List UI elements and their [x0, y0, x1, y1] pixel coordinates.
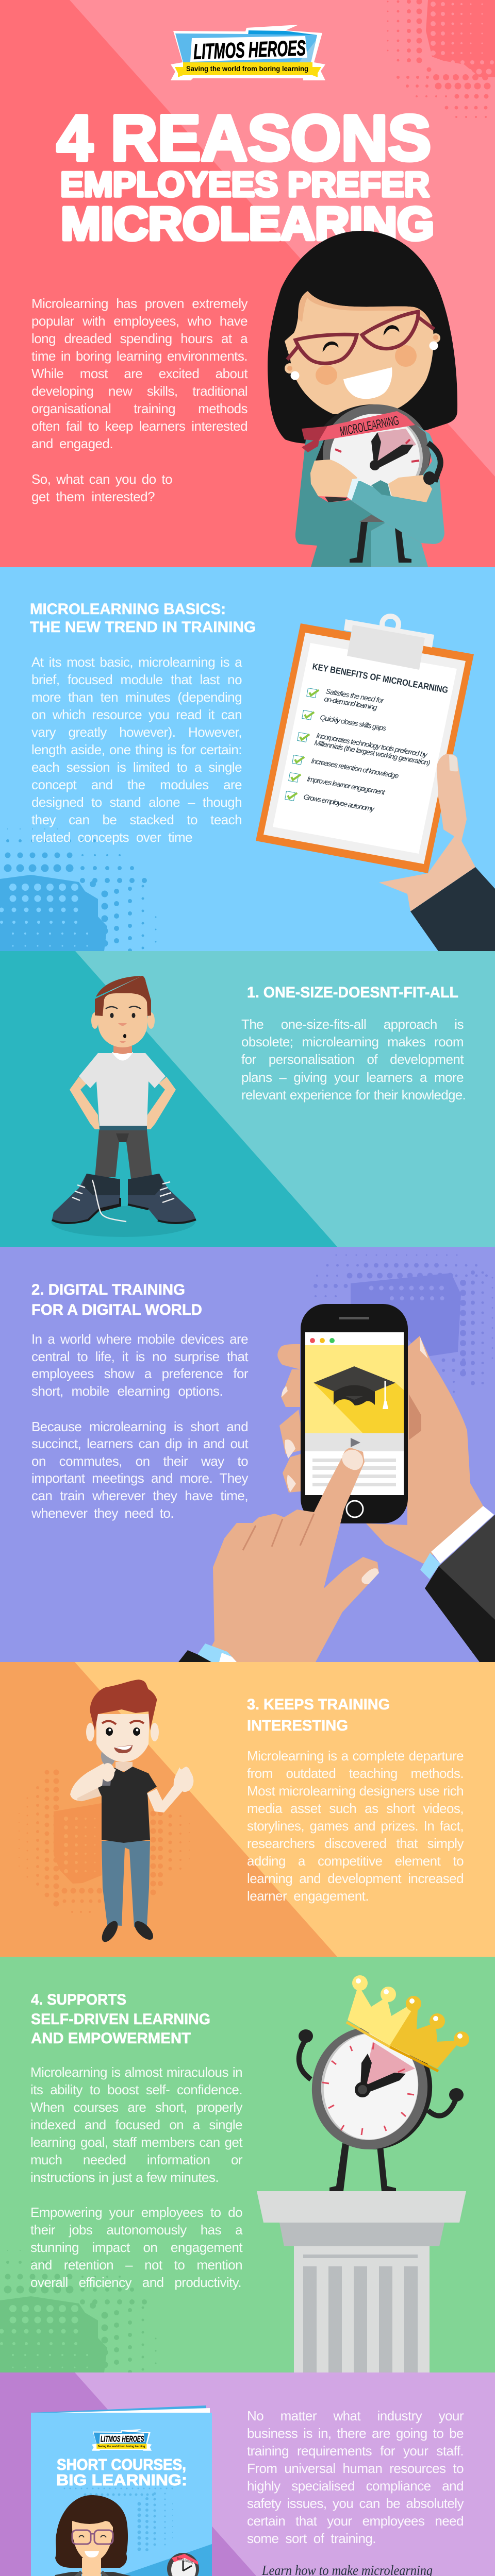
text: self-driven body	[30, 2064, 243, 2290]
pillar	[257, 2191, 466, 2372]
title: MICROLEARING	[61, 198, 434, 250]
text: basics body: brief, focused module that last no	[31, 672, 242, 687]
clipboard: on-demand learning	[324, 694, 378, 711]
halftone: green bottom left	[0, 2250, 156, 2372]
heading: basics: THE NEW TREND IN TRAINING	[30, 619, 256, 636]
heading: self-driven	[31, 1991, 210, 2047]
text: hero intro	[31, 296, 248, 504]
text: digital body: In a world where mobile devices are	[31, 1331, 248, 1347]
clipboard: Millennials (the largest working generation)	[314, 738, 431, 767]
text: hero intro: popular with employees, who have	[31, 313, 248, 329]
text: self-driven body: stunning impact on engagement	[30, 2240, 242, 2255]
text: final body: training requirements for your staff.	[247, 2443, 464, 2459]
text: self-driven body: their jobs autonomously has a	[30, 2222, 242, 2238]
text: basics body: related concepts over time	[31, 829, 192, 845]
title	[57, 103, 434, 250]
woman with clock: MICROLEARNING	[339, 413, 400, 439]
mini logo	[92, 2429, 152, 2451]
text: hero intro: get them interested?	[31, 489, 155, 504]
text: self-driven body: instructions in just a few minutes.	[30, 2170, 219, 2185]
text: digital body: employees show a preference for	[31, 1366, 248, 1381]
clock with crown	[299, 1975, 469, 2191]
text: hero intro: often fail to keep learners interested	[31, 418, 248, 434]
text: final body: business is in, there are going to be	[247, 2426, 464, 2441]
text: basics body: length aside, one thing is for certain:	[31, 742, 242, 757]
text: one size body: obsolete; microlearning makes room	[241, 1034, 464, 1049]
text: hero intro: long dreaded spending hours at a	[31, 331, 248, 346]
text: basics body: more than ten minutes (depending	[31, 689, 242, 705]
text: digital body: Because microlearning is short and	[31, 1419, 248, 1434]
left sleeve	[178, 1643, 237, 1662]
man with microphone	[70, 1680, 193, 1944]
hand behind clipboard	[379, 819, 475, 911]
text: self-driven body: its ability to boost self- confidence.	[30, 2082, 242, 2097]
text: final body	[247, 2408, 464, 2546]
heading: self-driven: AND EMPOWERMENT	[31, 2030, 191, 2047]
clipboard: Satisfies the need for	[325, 687, 385, 705]
text: interesting body	[247, 1748, 464, 1904]
text: hero intro: While most are excited about	[31, 366, 248, 381]
clipboard: KEY BENEFITS OF MICROLEARNING	[311, 661, 449, 695]
pointing hand	[211, 1448, 379, 1662]
panel: download ebook	[0, 2372, 495, 2576]
man with big shoes	[51, 976, 196, 1237]
ebook title: BIG LEARNING:	[56, 2471, 187, 2489]
text: basics body: concept and the modules are	[31, 777, 242, 792]
text: interesting body: media asset such as short videos,	[247, 1801, 464, 1816]
text: hero intro: developing new skills, traditional	[31, 383, 248, 399]
text: final body: highly specialised compliance and	[247, 2478, 464, 2494]
text: digital body: on commutes, on their way to	[31, 1453, 248, 1469]
text: final body: No matter what industry your	[247, 2408, 464, 2424]
text: digital body: whenever they need to.	[31, 1505, 174, 1521]
text: interesting body: Microlearning is a complete departure	[247, 1748, 464, 1764]
thumb	[437, 754, 467, 841]
text: basics body: each session is limited to a single	[31, 759, 242, 775]
text: final body: From universal human resources to	[247, 2461, 464, 2476]
text: interesting body: learner engagement.	[247, 1888, 369, 1904]
text: hero intro: Microlearning has proven extremely	[31, 296, 248, 311]
clipboard: Increases retention of knowledge	[310, 756, 400, 780]
halftone: orange	[19, 1772, 189, 1912]
text: hero intro: So, what can you do to	[31, 471, 172, 487]
panel: digital training	[0, 1247, 495, 1662]
text: digital body: important meetings and more. They	[31, 1470, 248, 1486]
text: basics body: designed to stand alone – though	[31, 794, 242, 810]
text: hero intro: organisational training methods	[31, 401, 248, 416]
text: one size body: for personalisation of development	[241, 1052, 464, 1067]
text: interesting body: storylines, games and prizes. In fact,	[247, 1818, 464, 1834]
heading: keeps training: 3. KEEPS TRAINING	[247, 1696, 390, 1713]
text: digital body: central to life, it is no surprise that	[31, 1349, 248, 1364]
halftone: hero top right	[388, 0, 495, 117]
text: one size body: plans – giving your learners a more	[241, 1070, 464, 1085]
text: digital body: succinct, learners can dip in and out	[31, 1436, 248, 1451]
text: digital body: can train wherever they have time,	[31, 1488, 248, 1503]
text: self-driven body: and retention – not to mention	[30, 2257, 242, 2273]
text: interesting body: Most microlearning designers use rich	[247, 1783, 464, 1799]
heading: digital: FOR A DIGITAL WORLD	[31, 1301, 202, 1318]
text: one size body	[241, 1016, 466, 1103]
logo: LITMOS HEROES	[193, 36, 306, 64]
panel: microlearning basics	[0, 567, 495, 951]
heading: self-driven: SELF-DRIVEN LEARNING	[31, 2011, 210, 2028]
ebook title	[56, 2455, 187, 2489]
text: hero intro: and engaged.	[31, 436, 113, 451]
heading: digital	[31, 1281, 202, 1318]
clipboard: Quickly closes skills gaps	[320, 713, 387, 732]
text: basics body: they can be stacked to teach	[31, 812, 242, 827]
text: basics body	[31, 654, 242, 845]
text: self-driven body: indexed and focused on a single	[30, 2117, 242, 2132]
halftone: blue bottom left	[0, 829, 156, 951]
logo	[171, 25, 325, 80]
panel: one size	[0, 951, 495, 1247]
text: self-driven body: learning goal, staff members can get	[30, 2134, 242, 2150]
halftone: ebook	[64, 2488, 175, 2550]
text: self-driven body: When courses are short, properly	[30, 2099, 242, 2115]
text: interesting body: from outdated teaching methods.	[247, 1766, 464, 1781]
ebook woman	[36, 2495, 201, 2576]
heading: self-driven: 4. SUPPORTS	[31, 1991, 126, 2008]
mini logo: LITMOS HEROES	[101, 2434, 144, 2444]
mini logo: Saving the world from boring learning	[98, 2445, 145, 2448]
hand holding phone	[277, 1336, 483, 1564]
text: basics body: on which resource you read it can	[31, 707, 242, 722]
halftone: purple top right	[316, 1255, 492, 1396]
title: 4 REASONS	[57, 103, 431, 174]
ebook cover	[31, 2405, 212, 2576]
text: self-driven body: Microlearning is almost miraculous in	[30, 2064, 242, 2080]
woman with clock	[268, 231, 457, 567]
text: one size body: The one-size-fits-all approach is	[241, 1016, 464, 1032]
text: final body: safety issues, you can be absolutely	[247, 2496, 464, 2511]
text: digital body	[31, 1331, 249, 1521]
title: EMPLOYEES PREFER	[60, 165, 430, 204]
text: final body: certain that your employees need	[247, 2513, 464, 2529]
logo: Saving the world from boring learning	[186, 64, 308, 73]
panel: self-driven learning	[0, 1957, 495, 2372]
text: digital body: short, mobile elearning options.	[31, 1383, 223, 1399]
text: one size body: relevant experience for their knowledge.	[241, 1087, 466, 1103]
sleeve	[410, 867, 495, 951]
text: final body: some sort of training.	[247, 2531, 376, 2546]
text: hero intro: time in boring learning environments.	[31, 348, 248, 364]
right sleeve	[420, 1506, 495, 1662]
text: self-driven body: much needed information or	[30, 2152, 242, 2167]
heading: digital: 2. DIGITAL TRAINING	[31, 1281, 185, 1298]
phone	[301, 1304, 408, 1523]
clipboard	[256, 616, 474, 873]
text: basics body: vary greatly however). However,	[31, 724, 242, 740]
text: interesting body: adding a competitive element to	[247, 1853, 464, 1869]
heading: one size: 1. ONE-SIZE-DOESNT-FIT-ALL	[247, 984, 458, 1001]
ebook woman: MICROLEARNING	[176, 2557, 193, 2565]
ebook title: SHORT COURSES,	[57, 2455, 186, 2473]
heading: keeps training: INTERESTING	[247, 1717, 348, 1734]
text: interesting body: researchers discovered that simply	[247, 1836, 464, 1851]
panel: keeps training interesting	[0, 1662, 495, 1957]
panel: hero	[0, 0, 495, 567]
heading: basics	[30, 601, 256, 636]
text: basics body: At its most basic, microlearning is a	[31, 654, 242, 670]
heading: basics: MICROLEARNING BASICS:	[30, 601, 226, 618]
text: self-driven body: Empowering your employees to do	[30, 2205, 242, 2220]
clipboard: Improves learner engagement	[306, 774, 386, 796]
heading: keeps training	[247, 1696, 390, 1734]
text: self-driven body: overall efficiency and productivity.	[30, 2275, 241, 2290]
nails on holding hand	[282, 1386, 296, 1492]
text: interesting body: learning and development increased	[247, 1871, 464, 1886]
clipboard: Incorporates technology tools preferred by	[316, 731, 428, 759]
clipboard: Grows employee autonomy	[303, 792, 375, 813]
